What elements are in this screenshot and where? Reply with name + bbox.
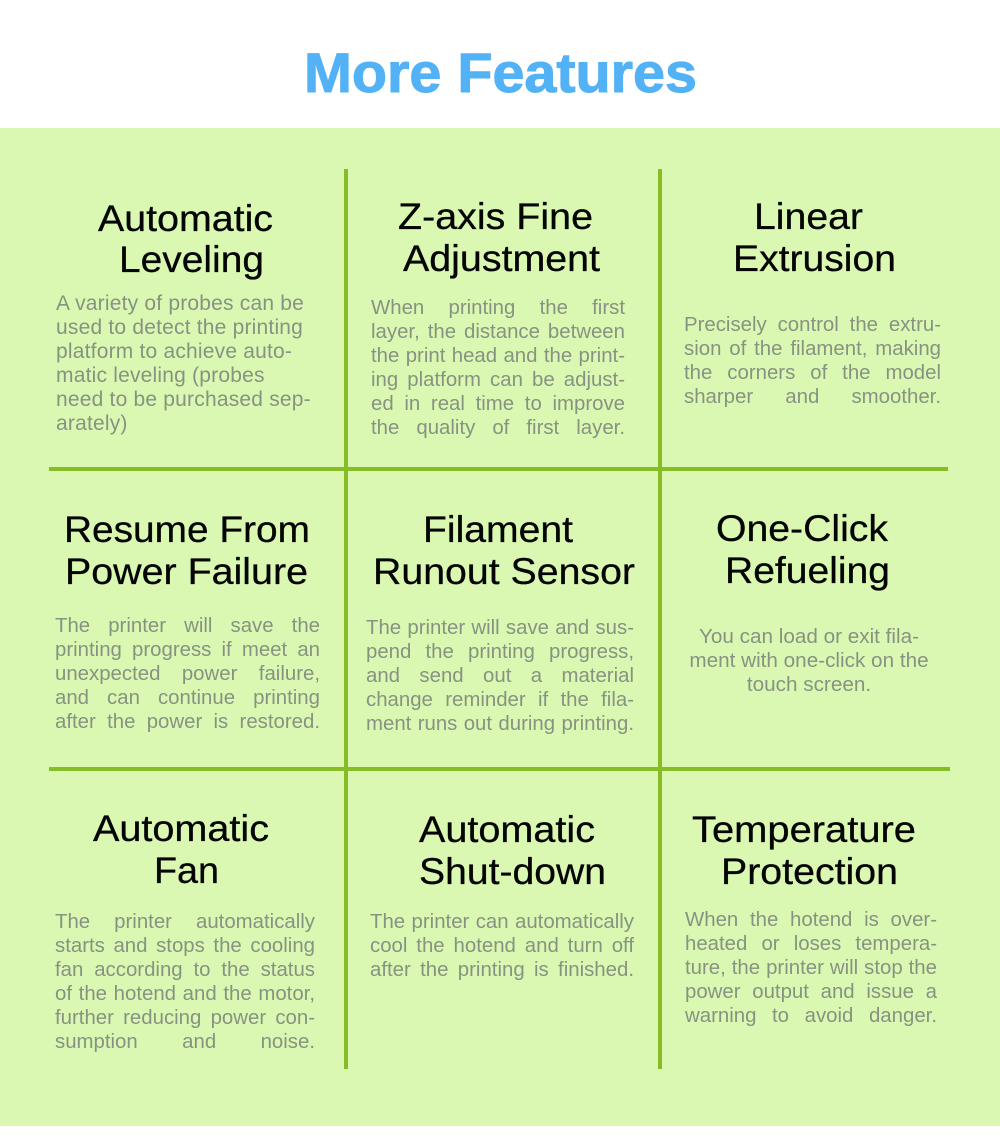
text: automatic leveling description: A variety of probes can be (56, 292, 304, 315)
text: filament runout description: pend the printing progress, (366, 641, 634, 663)
text: resume description: The printer will save the (55, 615, 320, 637)
heading: one-click refueling (716, 507, 890, 591)
heading: linear extrusion: Extrusion (733, 237, 896, 279)
heading: z-axis fine adjustment: Adjustment (403, 237, 601, 279)
heading: linear extrusion (733, 195, 896, 279)
heading: automatic leveling: Automatic (98, 197, 273, 239)
text: resume description: after the power is restored. (55, 711, 320, 733)
text: automatic fan description: starts and stops the cooling (55, 935, 315, 957)
panel: temperature protection (685, 808, 937, 1027)
text: z-axis description: layer, the distance between (371, 321, 625, 343)
text: automatic fan description: The printer automatically (55, 911, 315, 933)
text: automatic leveling description: arately) (56, 412, 128, 435)
text: one-click description: You can load or exit fila- (699, 625, 919, 648)
heading: automatic leveling (98, 197, 273, 280)
heading: z-axis fine adjustment: Z-axis Fine (398, 195, 593, 237)
text: automatic fan description: further reducing power con- (55, 1007, 315, 1029)
heading: automatic shut-down: Shut-down (419, 850, 606, 892)
text: automatic leveling description: used to detect the printing (56, 316, 303, 339)
title: More Features (304, 42, 697, 104)
heading: resume from power failure (64, 508, 310, 592)
heading: automatic shut-down (418, 808, 606, 892)
heading: one-click refueling: Refueling (725, 549, 890, 591)
panel: automatic shut-down (370, 808, 634, 981)
panel: z-axis fine adjustment (371, 195, 625, 439)
text: z-axis description: the print head and the print- (371, 345, 625, 367)
text: temperature protection description: heated or loses tempera- (685, 933, 937, 955)
panel: automatic leveling (56, 197, 311, 435)
panel: automatic fan (55, 807, 315, 1053)
text: automatic leveling description (56, 292, 311, 435)
heading: temperature protection (692, 808, 916, 892)
text: automatic leveling description: matic leveling (probes (56, 364, 265, 387)
text: resume description (55, 615, 320, 733)
heading: filament runout sensor: Runout Sensor (373, 550, 635, 592)
text: linear extrusion description: the corners of the model (684, 362, 941, 384)
text: automatic leveling description: need to be purchased sep- (56, 388, 311, 411)
text: linear extrusion description: Precisely control the extru- (684, 314, 941, 336)
heading: resume from power failure: Power Failure (65, 550, 308, 592)
text: automatic fan description (55, 911, 315, 1053)
heading: temperature protection: Protection (721, 850, 898, 892)
heading: automatic fan (92, 807, 269, 891)
text: one-click description: touch screen. (747, 673, 871, 696)
text: one-click description: ment with one-click on the (689, 649, 929, 672)
heading: resume from power failure: Resume From (64, 508, 310, 550)
text: temperature protection description: warning to avoid danger. (685, 1005, 937, 1027)
text: temperature protection description: ture, the printer will stop the (685, 957, 937, 979)
text: z-axis description (371, 297, 625, 439)
text: automatic fan description: of the hotend and the motor, (55, 983, 315, 1005)
text: automatic shut-down description (370, 911, 634, 981)
text: automatic shut-down description: The printer can automatically (370, 911, 634, 933)
text: resume description: and can continue printing (55, 687, 320, 709)
text: filament runout description (366, 617, 634, 735)
heading: automatic shut-down: Automatic (419, 808, 595, 850)
text: linear extrusion description: sion of the filament, making (684, 338, 941, 360)
panel: resume from power failure (55, 508, 320, 733)
text: automatic fan description: sumption and noise. (55, 1031, 315, 1053)
heading: automatic leveling: Leveling (119, 238, 264, 280)
text: z-axis description: the quality of first layer. (371, 417, 625, 439)
heading: one-click refueling: One-Click (716, 507, 888, 549)
text: filament runout description: change reminder if the fila- (366, 689, 634, 711)
text: z-axis description: When printing the first (371, 297, 625, 319)
text: z-axis description: ing platform can be adjust- (371, 369, 625, 391)
text: z-axis description: ed in real time to improve (371, 393, 625, 415)
text: filament runout description: and send out a material (366, 665, 634, 687)
text: resume description: printing progress if meet an (55, 639, 320, 661)
panel: linear extrusion (684, 195, 941, 408)
text: automatic shut-down description: after the printing is finished. (370, 959, 634, 981)
text: one-click description (689, 625, 929, 696)
heading: temperature protection: Temperature (692, 808, 916, 850)
text: linear extrusion description (684, 314, 941, 408)
text: resume description: unexpected power failure, (55, 663, 320, 685)
text: temperature protection description (685, 909, 937, 1027)
text: temperature protection description: When the hotend is over- (685, 909, 937, 931)
heading: z-axis fine adjustment (398, 195, 601, 279)
panel: filament runout sensor (366, 508, 635, 735)
heading: automatic fan: Fan (154, 849, 219, 891)
heading: filament runout sensor: Filament (423, 508, 574, 550)
text: automatic shut-down description: cool the hotend and turn off (370, 935, 634, 957)
text: filament runout description: The printer will save and sus- (366, 617, 634, 639)
heading: filament runout sensor (373, 508, 635, 592)
text: filament runout description: ment runs out during printing. (366, 713, 634, 735)
panel: one-click refueling (689, 507, 929, 696)
text: automatic leveling description: platform to achieve auto- (56, 340, 292, 363)
heading: automatic fan: Automatic (93, 807, 269, 849)
text: temperature protection description: power output and issue a (685, 981, 937, 1003)
text: linear extrusion description: sharper and smoother. (684, 386, 941, 408)
heading: linear extrusion: Linear (754, 195, 863, 237)
text: automatic fan description: fan according to the status (55, 959, 315, 981)
